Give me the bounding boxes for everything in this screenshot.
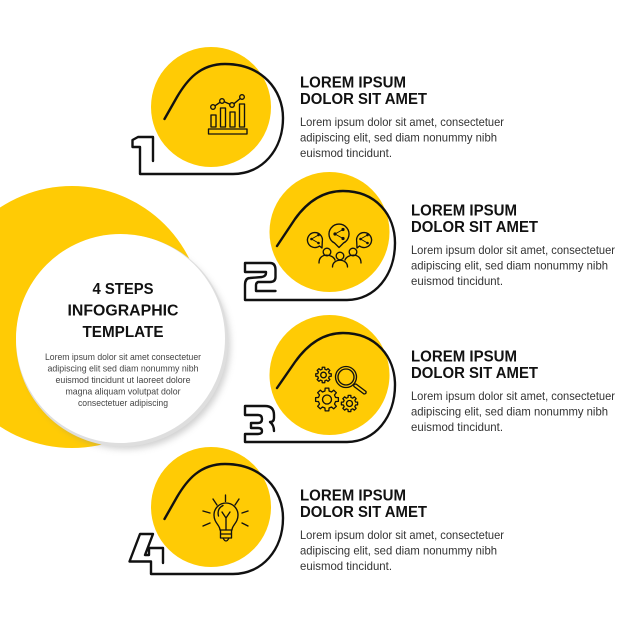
step 1 text: [300, 116, 504, 160]
step 2 text: adipiscing elit, sed diam nonummy nibh: [411, 260, 608, 272]
yellow circle: [270, 172, 390, 292]
icon: gears and magnifier: [316, 366, 366, 412]
white circle rim: [16, 234, 228, 446]
outline with numeral 1: [132, 64, 283, 174]
step 2 text: euismod tincidunt.: [411, 275, 503, 288]
large yellow circle: [0, 186, 203, 448]
step 2 heading: DOLOR SIT AMET: [411, 219, 539, 236]
step 2 heading: [411, 202, 539, 236]
icon: bar chart: [208, 95, 247, 134]
step 3 text: adipiscing elit, sed diam nonummy nibh: [411, 406, 608, 418]
central description: [45, 352, 201, 408]
central title: INFOGRAPHIC: [68, 302, 178, 320]
step 4 text: euismod tincidunt.: [300, 560, 392, 573]
step 1 text: euismod tincidunt.: [300, 147, 392, 160]
step 3 heading: LOREM IPSUM: [411, 348, 517, 366]
panel: step 3: [245, 315, 615, 442]
step 3 text: Lorem ipsum dolor sit amet, consectetuer: [411, 390, 615, 403]
icon: light bulb: [203, 495, 248, 541]
yellow circle: [270, 315, 390, 435]
step 2 text: [411, 244, 615, 288]
panel: central summary circle: [0, 186, 230, 449]
white circle shadow: [22, 241, 230, 449]
central title: 4 STEPS: [92, 281, 154, 298]
step 3 heading: [411, 348, 539, 382]
yellow circle: [151, 47, 271, 167]
step 3 heading: DOLOR SIT AMET: [411, 365, 539, 382]
central description: consectetuer adipiscing: [78, 398, 168, 408]
central title: TEMPLATE: [82, 324, 164, 341]
outline with numeral 3: [245, 333, 395, 442]
outline with numeral 4: [130, 464, 283, 574]
step 1 heading: DOLOR SIT AMET: [300, 91, 428, 108]
white circle: [16, 234, 225, 443]
panel: step 1: [132, 47, 504, 174]
step 4 text: Lorem ipsum dolor sit amet, consectetuer: [300, 529, 504, 542]
step 4 heading: DOLOR SIT AMET: [300, 504, 428, 521]
panel: step 2: [245, 172, 615, 300]
panel: step 4: [130, 447, 504, 574]
central description: Lorem ipsum dolor sit amet consectetuer: [45, 352, 201, 362]
step 3 text: [411, 390, 615, 434]
yellow circle: [151, 447, 271, 567]
step 4 text: [300, 529, 504, 573]
step 4 text: adipiscing elit, sed diam nonummy nibh: [300, 544, 497, 558]
step 1 text: Lorem ipsum dolor sit amet, consectetuer: [300, 116, 504, 129]
step 2 text: Lorem ipsum dolor sit amet, consectetuer: [411, 244, 615, 257]
step 2 heading: LOREM IPSUM: [411, 202, 517, 220]
step 3 text: euismod tincidunt.: [411, 421, 503, 434]
outline with numeral 2: [245, 191, 395, 300]
central description: euismod tincidunt ut laoreet dolore: [56, 375, 190, 385]
step 4 heading: LOREM IPSUM: [300, 488, 406, 504]
step 1 heading: [300, 74, 428, 108]
step 1 heading: LOREM IPSUM: [300, 74, 406, 92]
step 4 heading: [300, 488, 428, 521]
icon: people sharing ideas: [307, 224, 372, 267]
central title: [68, 281, 178, 341]
central description: magna aliquam volutpat dolor: [66, 386, 180, 396]
central description: adipiscing elit sed diam nonummy nibh: [48, 364, 198, 374]
step 1 text: adipiscing elit, sed diam nonummy nibh: [300, 132, 497, 144]
